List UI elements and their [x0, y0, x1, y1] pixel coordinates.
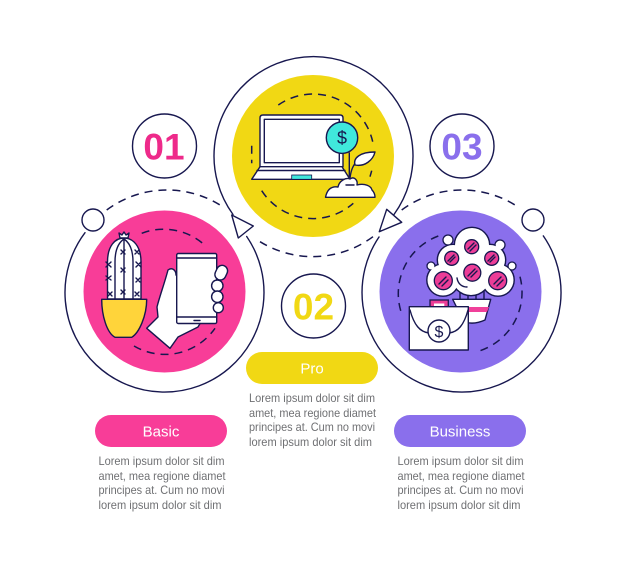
- icon: hand holding phone: [147, 254, 229, 348]
- badge: 03: [430, 114, 494, 178]
- badge: 03: 03: [441, 126, 483, 168]
- panel: basic disc with cactus and phone: [84, 210, 246, 372]
- icon: plant with dollar coin: $: [337, 128, 347, 148]
- icon: cactus: [102, 232, 147, 337]
- text block: Pro description: Lorem ipsum dolor sit dim: [249, 391, 375, 405]
- text block: Pro description: [249, 391, 377, 449]
- pill: Pro: Pro: [300, 360, 324, 378]
- text block: Basic description: amet, mea regione diamet: [98, 469, 226, 483]
- pill: Basic: Basic: [143, 424, 180, 440]
- pill: Business: Business: [430, 424, 490, 440]
- icon: laptop: [252, 115, 350, 179]
- badge: 02: 02: [293, 286, 334, 328]
- arrow: step 2 to step 3: [379, 209, 402, 232]
- ring: step 2 outline: [214, 57, 413, 257]
- text block: Basic description: principes at. Cum no movi: [98, 483, 224, 497]
- text block: Basic description: [98, 454, 226, 512]
- text block: Pro description: principes at. Cum no movi: [249, 420, 375, 434]
- ring: step 3 outline: [362, 190, 561, 392]
- text block: Basic description: lorem ipsum dolor sit dim: [98, 498, 222, 512]
- text block: Business description: principes at. Cum no movi: [398, 483, 524, 497]
- text block: Pro description: lorem ipsum dolor sit dim: [249, 435, 372, 449]
- ring: step 1 outline: [65, 190, 264, 392]
- icon: briefcase with dollar: [409, 300, 468, 350]
- badge: 02: [282, 274, 346, 338]
- text block: Business description: lorem ipsum dolor sit dim: [398, 498, 520, 512]
- text block: Business description: Lorem ipsum dolor sit dim: [398, 454, 524, 468]
- panel: business disc with tree and briefcase: [380, 210, 542, 372]
- icon: briefcase with dollar: $: [435, 324, 444, 341]
- pill: Business: [394, 415, 526, 447]
- badge: 01: [132, 114, 196, 178]
- badge: 01: 01: [143, 126, 185, 168]
- pill: Pro: [246, 352, 378, 384]
- text block: Business description: [398, 454, 525, 512]
- arrow: step 1 to step 2: [232, 215, 253, 238]
- icon: plant with dollar coin: [326, 122, 375, 197]
- text block: Pro description: amet, mea regione diamet: [249, 406, 377, 420]
- pill: Basic: [95, 415, 227, 447]
- text block: Business description: amet, mea regione diamet: [398, 469, 525, 483]
- panel: pro disc with laptop and plant: [232, 75, 394, 237]
- text block: Basic description: Lorem ipsum dolor sit dim: [98, 454, 224, 468]
- icon: money tree: [427, 228, 516, 323]
